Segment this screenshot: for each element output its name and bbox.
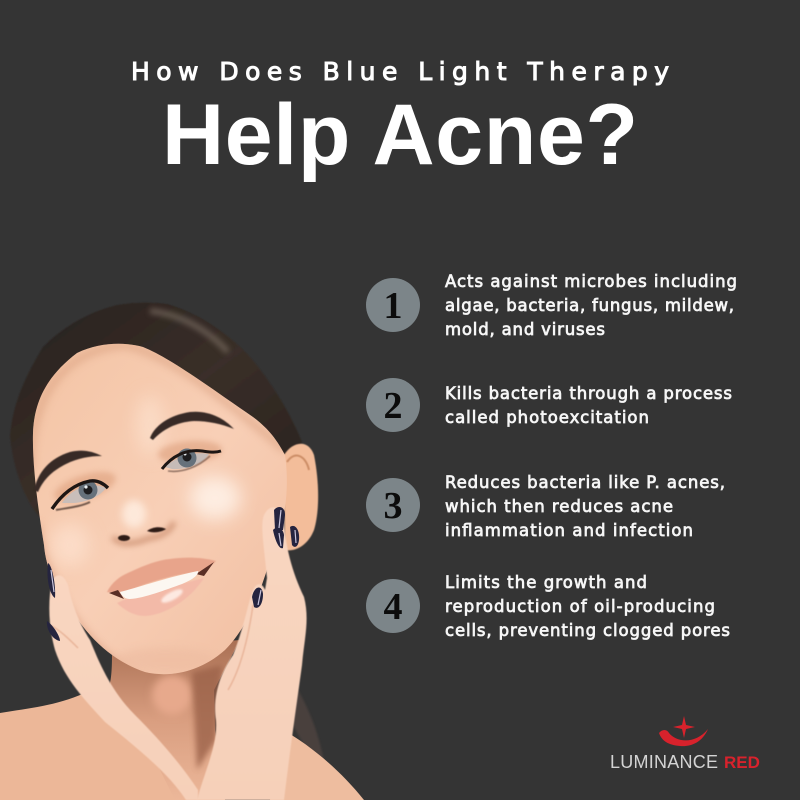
face [32,344,287,674]
title line: help acne: Help Acne? [162,87,638,183]
text 1: algae, bacteria, fungus, mildew, [445,296,734,315]
badge 2: 2 [384,385,402,427]
shoulder right [270,730,364,800]
teeth [120,571,198,599]
badge 1: 1 [384,285,402,327]
nose glow [122,500,146,528]
ear [284,444,318,550]
hair [10,303,302,522]
logo wordmark: LUMINANCE [610,752,718,772]
text 3: which then reduces acne [445,497,673,516]
lips and smile [107,558,216,616]
right hand [197,507,307,800]
lower lip [117,578,204,616]
text 2: Kills bacteria through a process [445,384,732,403]
text 2 [445,384,732,427]
nails on right hand [274,507,285,530]
text 3: Reduces bacteria like P. acnes, [445,473,725,492]
eye socket shade [53,470,117,504]
logo: luminance red [610,716,760,772]
text 4: reproduction of oil-producing [445,597,715,616]
mouth corners [109,562,214,599]
right eye [162,448,221,471]
badge 3: 3 [384,485,402,527]
neck shadow [192,665,222,770]
hairline shading [30,345,285,470]
text 1: Acts against microbes including [445,272,737,291]
lower lip gloss [160,587,184,605]
text 4: Limits the growth and [445,573,647,592]
title [131,57,669,183]
text 1: mold, and viruses [445,320,605,339]
title line: how does blue light therapy: How Does Blue Light Therapy [131,57,669,86]
hair ponytail [290,690,324,762]
left hand [49,575,198,800]
text 4 [445,573,730,640]
neck light patch [152,675,192,715]
badge 3 [366,478,420,532]
item 4 [366,573,730,640]
text 3 [445,473,725,540]
cheek left glow [50,523,90,567]
badge 4 [366,579,420,633]
badge 2 [366,378,420,432]
nails [47,507,299,641]
hair highlight [150,311,228,352]
item 2 [366,378,732,432]
photo: smiling woman touching her face [0,303,364,800]
jaw shading [41,524,118,658]
neck [108,640,240,800]
text 3: inflammation and infection [445,521,693,540]
logo icon: red star and crescent [659,716,708,746]
nail highlights [51,510,296,605]
forehead glow [136,395,164,455]
list of four benefits [366,272,737,640]
upper lip [107,558,216,593]
item 1 [366,272,737,339]
hand crease [50,605,253,690]
shoulders [0,693,190,800]
item 3 [366,473,725,540]
text 1 [445,272,737,339]
nose shadow [113,522,174,543]
right eyebrow [150,412,234,440]
eye socket shade right [157,438,223,466]
nose nostrils [118,527,166,541]
nails on left hand [47,563,55,598]
text 4: cells, preventing clogged pores [445,621,730,640]
chin shade [126,654,160,666]
cheek glow [189,476,241,520]
text 2: called photoexcitation [445,408,649,427]
ear inner [287,456,309,470]
logo wordmark: RED [724,753,760,772]
left eye [52,480,108,510]
left eyebrow [34,451,102,492]
badge 1 [366,278,420,332]
badge 4: 4 [384,586,402,628]
